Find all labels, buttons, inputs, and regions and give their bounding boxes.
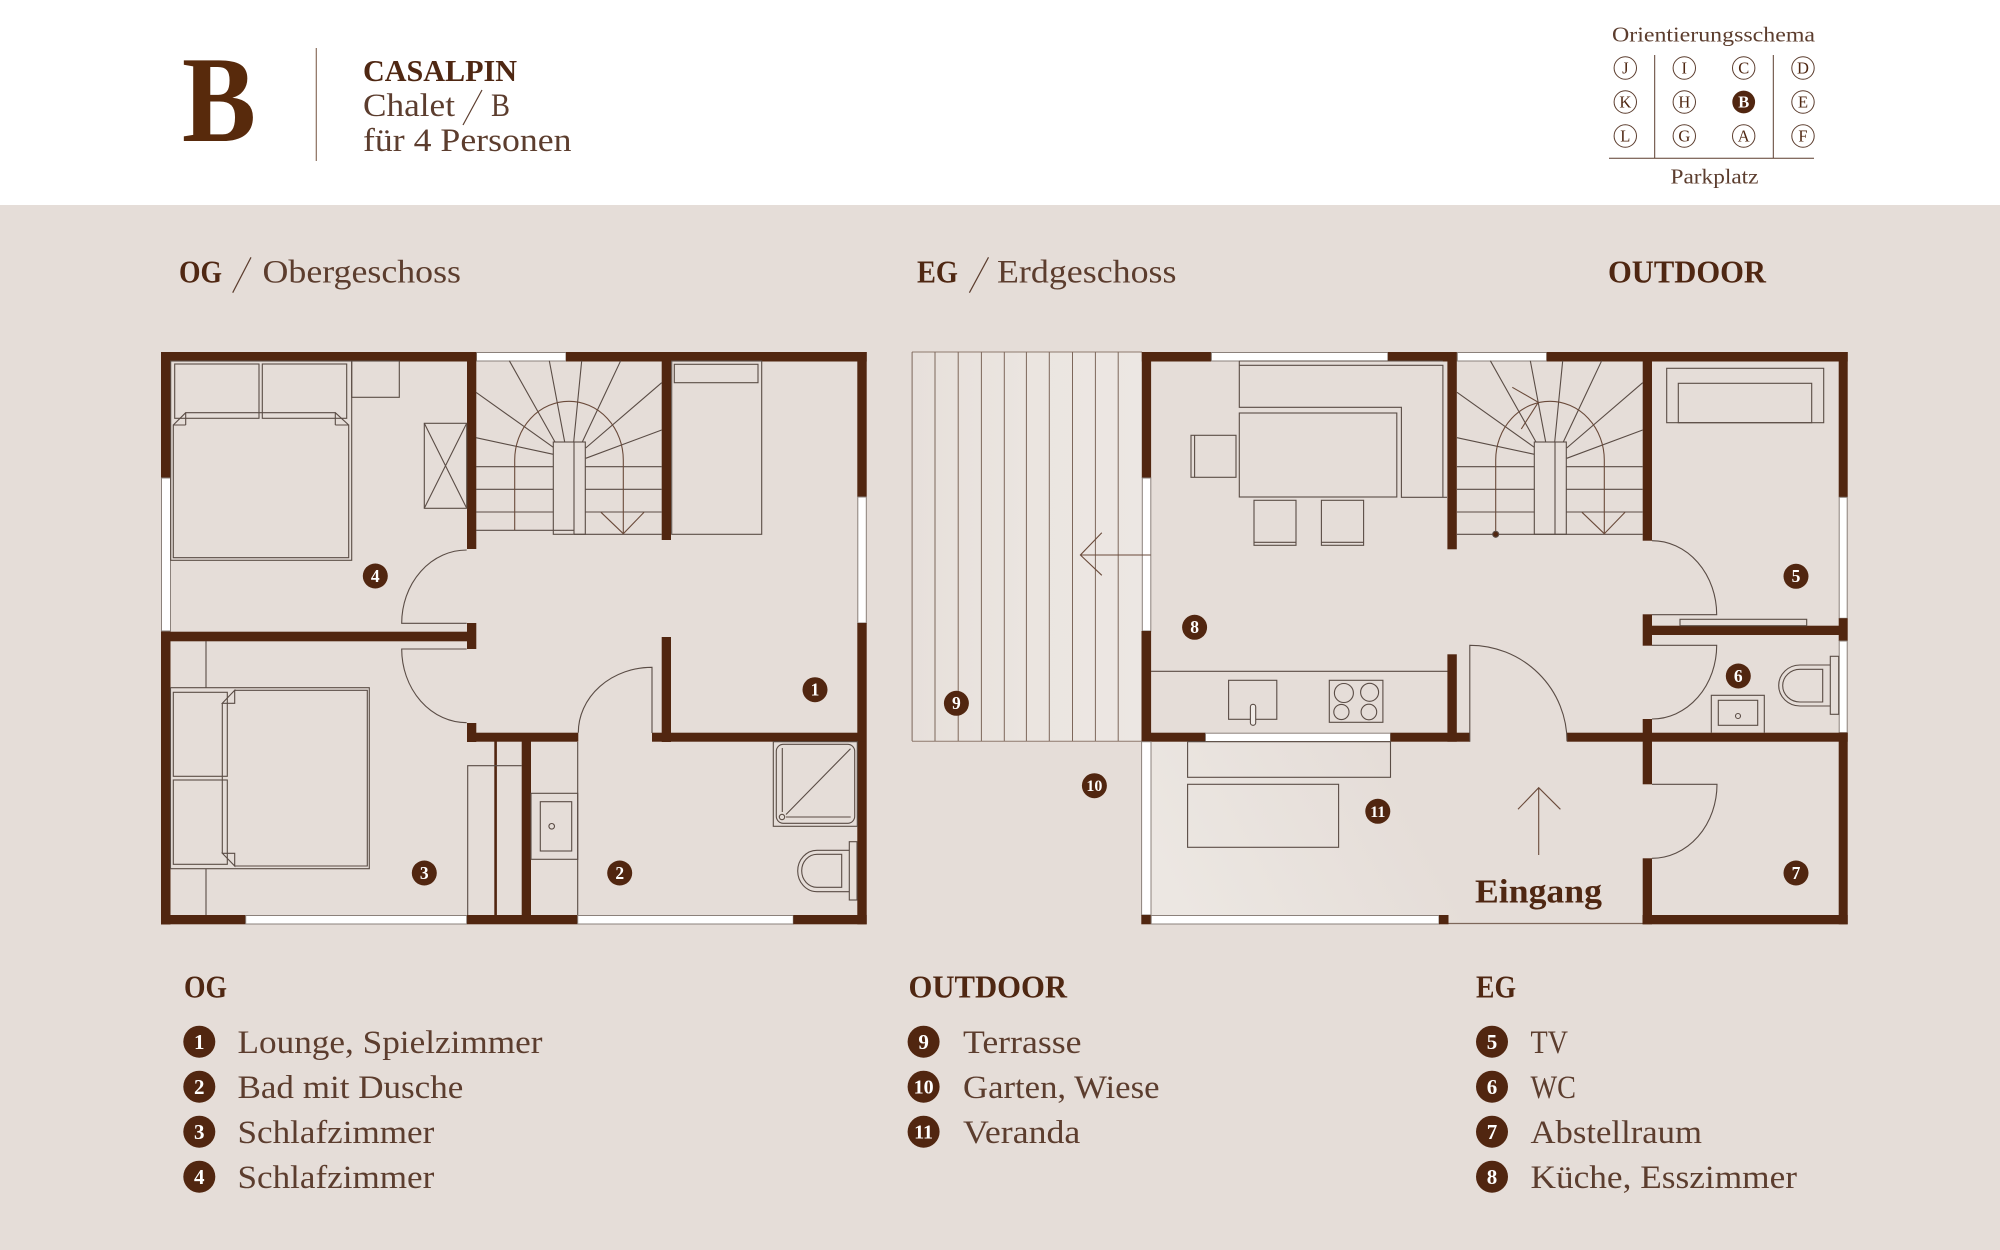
EG doors <box>1470 541 1717 858</box>
legend: OUTDOOR: 9 <box>918 1030 929 1054</box>
header band <box>0 0 2000 205</box>
legend: OG: 4 <box>194 1165 205 1189</box>
legend: EG: WC <box>1530 1070 1576 1106</box>
legend: EG: 6 <box>1487 1075 1497 1099</box>
legend: EG: Küche, Esszimmer <box>1530 1160 1797 1196</box>
entrance label: Eingang <box>1475 874 1602 911</box>
OG doors <box>402 550 652 733</box>
legend: OG: 1 <box>194 1030 205 1054</box>
legend: OUTDOOR <box>908 970 1160 1151</box>
legend: EG: 5 <box>1487 1030 1497 1054</box>
header title block: CASALPIN <box>363 53 517 88</box>
heading: OG Obergeschoss: OG <box>179 255 222 290</box>
heading: EG Erdgeschoss: Erdgeschoss <box>997 255 1176 291</box>
legend: OUTDOOR: Veranda <box>963 1115 1081 1151</box>
orientation schema: E <box>1798 93 1808 112</box>
heading: EG Erdgeschoss: EG <box>917 255 958 290</box>
legend: OG: Schlafzimmer <box>238 1115 434 1151</box>
legend: OG: Lounge, Spielzimmer <box>238 1025 543 1061</box>
orientation schema: Parkplatz <box>1670 164 1758 188</box>
legend: EG: TV <box>1530 1025 1568 1061</box>
header title block: B <box>491 88 510 124</box>
orientation schema: D <box>1797 59 1809 78</box>
orientation schema: A <box>1738 127 1750 146</box>
orientation schema: F <box>1798 127 1808 146</box>
legend: OUTDOOR: 11 <box>914 1122 933 1144</box>
OG staircase <box>476 361 662 534</box>
legend: EG: 7 <box>1487 1120 1497 1144</box>
OG walls and windows <box>161 352 867 924</box>
legend: EG: 8 <box>1487 1165 1497 1189</box>
header title block <box>363 53 572 159</box>
legend: OUTDOOR: Garten, Wiese <box>963 1070 1160 1106</box>
room markers EG: 9 <box>952 693 961 713</box>
bathroom fixtures <box>531 742 857 915</box>
bedroom 1 bed <box>672 361 762 534</box>
orientation schema: I <box>1682 59 1687 78</box>
bedroom 3 furniture <box>170 641 522 915</box>
header divider <box>315 48 317 161</box>
terrace decking <box>912 352 1142 741</box>
legend: EG <box>1476 970 1797 1196</box>
room markers OG: 3 <box>420 863 429 883</box>
arrow: entrance <box>1518 788 1560 855</box>
orientation schema <box>1609 23 1815 188</box>
room markers EG: 11 <box>1370 804 1385 821</box>
room markers OG: 1 <box>811 680 819 700</box>
arrow: terrace exit <box>1080 533 1151 575</box>
room markers EG: 10 <box>1086 778 1102 795</box>
orientation schema: K <box>1619 93 1631 112</box>
orientation schema: L <box>1620 127 1630 146</box>
room markers OG: 2 <box>615 863 624 883</box>
floor plan: OG <box>161 352 867 924</box>
orientation schema: G <box>1678 127 1690 146</box>
dining area <box>1191 361 1447 545</box>
header title block: Chalet <box>363 88 455 124</box>
room markers OG <box>363 564 828 886</box>
header title block: für 4 Personen <box>363 123 572 159</box>
legend: OUTDOOR: 10 <box>914 1076 934 1098</box>
EG staircase <box>1457 361 1643 537</box>
legend: OG: Schlafzimmer <box>238 1160 434 1196</box>
heading: OUTDOOR: OUTDOOR <box>1608 255 1767 290</box>
heading: OG Obergeschoss <box>179 255 461 293</box>
legend: OG <box>183 970 543 1196</box>
room markers EG <box>944 564 1808 886</box>
legend: OG: Bad mit Dusche <box>238 1070 463 1106</box>
orientation schema: C <box>1738 59 1749 78</box>
legend: EG: Abstellraum <box>1530 1115 1702 1151</box>
veranda furniture <box>1188 742 1390 847</box>
legend: OG: 3 <box>194 1120 205 1144</box>
orientation schema: H <box>1678 93 1690 112</box>
WC fixtures <box>1711 656 1839 733</box>
legend: OG: 2 <box>194 1075 205 1099</box>
room markers EG: 6 <box>1734 666 1743 686</box>
room markers OG: 4 <box>371 566 380 586</box>
room markers EG: 7 <box>1792 863 1801 883</box>
room markers EG: 8 <box>1190 617 1199 637</box>
orientation schema: J <box>1622 59 1629 78</box>
TV room furniture <box>1667 368 1824 626</box>
chalet letter B: B <box>182 31 256 168</box>
room markers EG: 5 <box>1792 566 1801 586</box>
bedroom 4 furniture <box>171 361 467 560</box>
legend: OUTDOOR: Terrasse <box>963 1025 1082 1061</box>
legend: EG: EG <box>1476 970 1516 1005</box>
EG walls and windows <box>1141 352 1848 924</box>
veranda floor <box>1151 742 1642 923</box>
heading: EG Erdgeschoss <box>917 255 1176 293</box>
floor plan: EG <box>944 352 1848 924</box>
orientation schema: Orientierungsschema <box>1612 23 1815 47</box>
legend: OG: OG <box>184 970 227 1005</box>
kitchen counter <box>1151 671 1448 725</box>
orientation schema: B <box>1738 93 1749 112</box>
heading: OG Obergeschoss: Obergeschoss <box>262 255 461 291</box>
legend: OUTDOOR: OUTDOOR <box>908 970 1068 1005</box>
